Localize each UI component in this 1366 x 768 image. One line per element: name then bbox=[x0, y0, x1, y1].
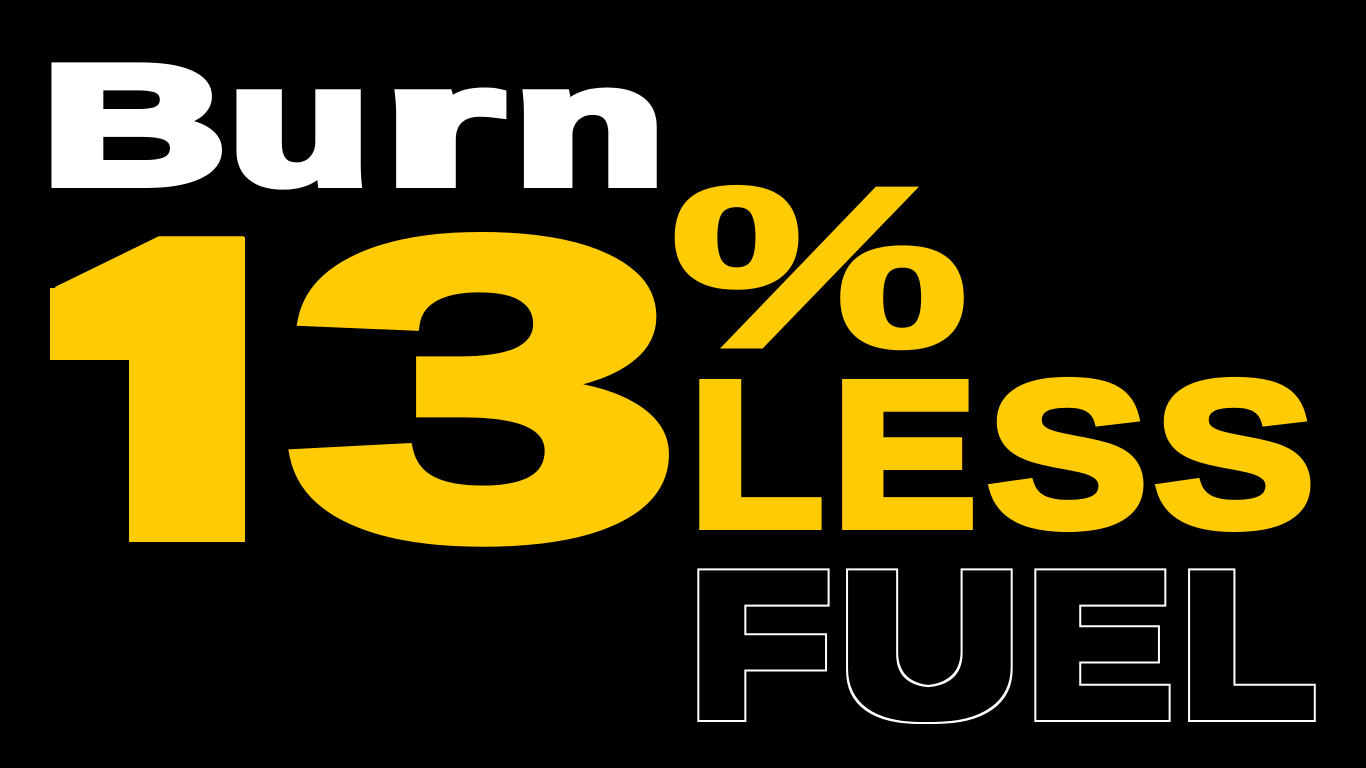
word: LESS: S bbox=[1155, 340, 1314, 569]
digit 3: 3 bbox=[285, 151, 683, 625]
word: LESS: E bbox=[833, 340, 976, 569]
heading: Burn: n bbox=[514, 31, 665, 219]
heading: Burn: r bbox=[384, 31, 502, 219]
heading: Burn: u bbox=[229, 31, 370, 219]
outlined word: FUEL: U bbox=[839, 534, 1020, 757]
heading: Burn bbox=[42, 31, 665, 219]
big number: 13 bbox=[50, 232, 669, 547]
heading: Burn: B bbox=[42, 31, 226, 219]
outlined word: FUEL: E bbox=[1028, 534, 1171, 757]
digit 1: 1 bbox=[26, 151, 339, 625]
infographic canvas bbox=[50, 62, 1316, 724]
word: LESS bbox=[690, 340, 1314, 569]
digit 1 bbox=[50, 236, 245, 542]
outlined word: FUEL: L bbox=[1182, 534, 1314, 757]
outlined word: FUEL bbox=[690, 534, 1314, 757]
percent sign: % bbox=[670, 141, 969, 395]
word: LESS: L bbox=[690, 340, 823, 569]
outlined word: FUEL: F bbox=[690, 534, 830, 757]
word: LESS: S bbox=[988, 340, 1147, 569]
